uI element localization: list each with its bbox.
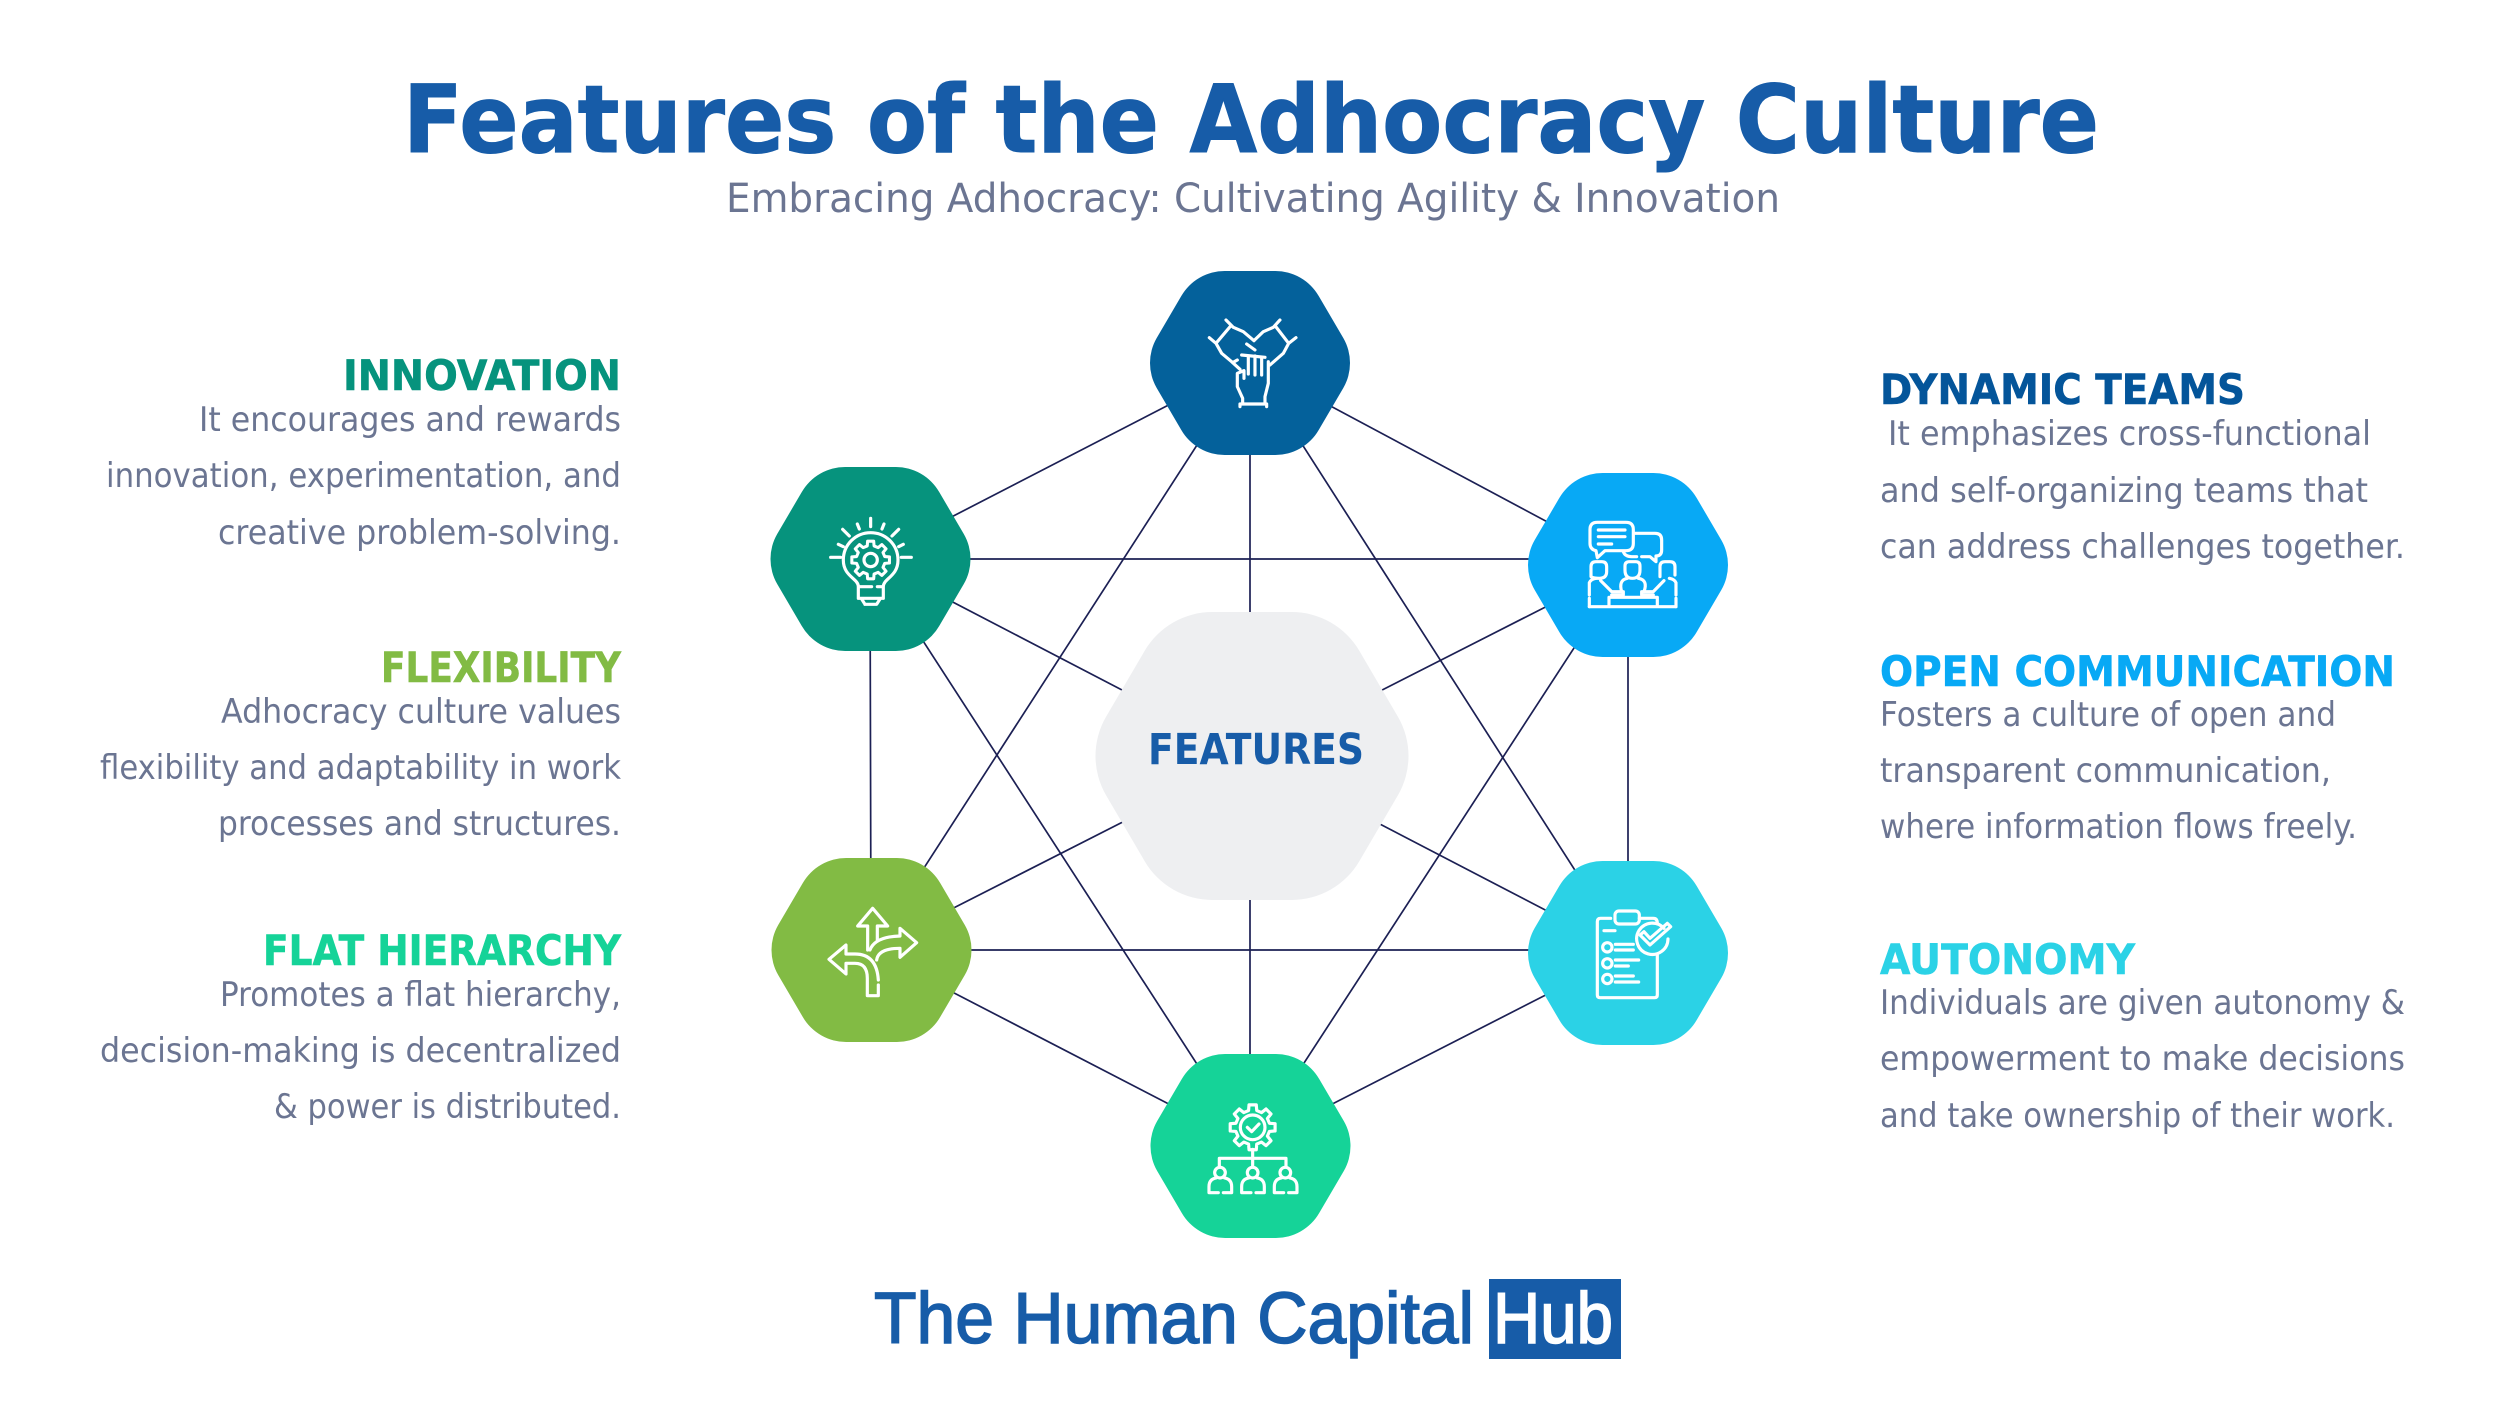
center hexagon: features	[1096, 612, 1408, 900]
text block: autonomy: empowerment to make decisions	[1880, 1039, 2405, 1079]
text block: flexibility: FLEXIBILITY	[381, 643, 621, 692]
hexagon icon: innovation lightbulb gear	[771, 467, 970, 651]
text block: open communication: OPEN COMMUNICATION	[1880, 647, 2395, 696]
text block: innovation: innovation, experimentation, and	[106, 456, 621, 496]
text block: autonomy: AUTONOMY	[1880, 935, 2136, 984]
text block: dynamic teams	[1880, 365, 2405, 567]
text block: flat hierarchy: Promotes a flat hierarchy,	[220, 975, 621, 1015]
hexagon icon: flexibility arrows	[772, 858, 971, 1042]
text block: autonomy: Individuals are given autonomy &	[1880, 983, 2405, 1023]
text block: flexibility	[100, 643, 621, 844]
text block: innovation	[106, 351, 621, 553]
hexagon icon: flat hierarchy org gear	[1151, 1054, 1350, 1238]
title: Features of the Adhocracy Culture	[403, 66, 2099, 175]
logo: the human capital hub: The Human Capital	[874, 1279, 1474, 1359]
hexagon icon: open communication meeting	[1528, 473, 1728, 657]
text block: flat hierarchy: & power is distributed.	[274, 1087, 621, 1127]
network connecting lines	[870, 363, 1628, 1146]
text block: flat hierarchy: decision-making is decentralized	[100, 1031, 621, 1071]
text block: innovation: creative problem-solving.	[218, 513, 621, 553]
text block: flexibility: processes and structures.	[218, 804, 621, 844]
hexagon icon: dynamic teams hands (top)	[1150, 271, 1350, 455]
text block: open communication: Fosters a culture of open and	[1880, 695, 2336, 735]
center hexagon: features: FEATURES	[1148, 725, 1364, 775]
text block: open communication: where information flows freely.	[1880, 807, 2357, 847]
text block: innovation: It encourages and rewards	[199, 400, 621, 440]
text block: autonomy: and take ownership of their work.	[1880, 1096, 2395, 1136]
hexagon icon: autonomy checklist	[1528, 861, 1728, 1045]
text block: dynamic teams: and self-organizing teams that	[1880, 471, 2368, 511]
logo: the human capital hub: Hub	[1493, 1279, 1613, 1359]
text block: autonomy	[1880, 935, 2405, 1136]
text block: open communication: transparent communication,	[1880, 751, 2331, 791]
text block: open communication	[1880, 647, 2395, 847]
text block: innovation: INNOVATION	[343, 351, 621, 400]
text block: flat hierarchy: FLAT HIERARCHY	[263, 926, 622, 975]
text block: flexibility: Adhocracy culture values	[221, 692, 621, 732]
text block: flat hierarchy	[100, 926, 622, 1127]
text block: flexibility: flexibility and adaptability in work	[100, 748, 621, 788]
text block: dynamic teams: It emphasizes cross-functional	[1888, 414, 2371, 454]
text block: dynamic teams: can address challenges together.	[1880, 527, 2405, 567]
subtitle: Embracing Adhocracy: Cultivating Agility & Innovation	[726, 176, 1780, 222]
text block: dynamic teams: DYNAMIC TEAMS	[1880, 365, 2245, 414]
